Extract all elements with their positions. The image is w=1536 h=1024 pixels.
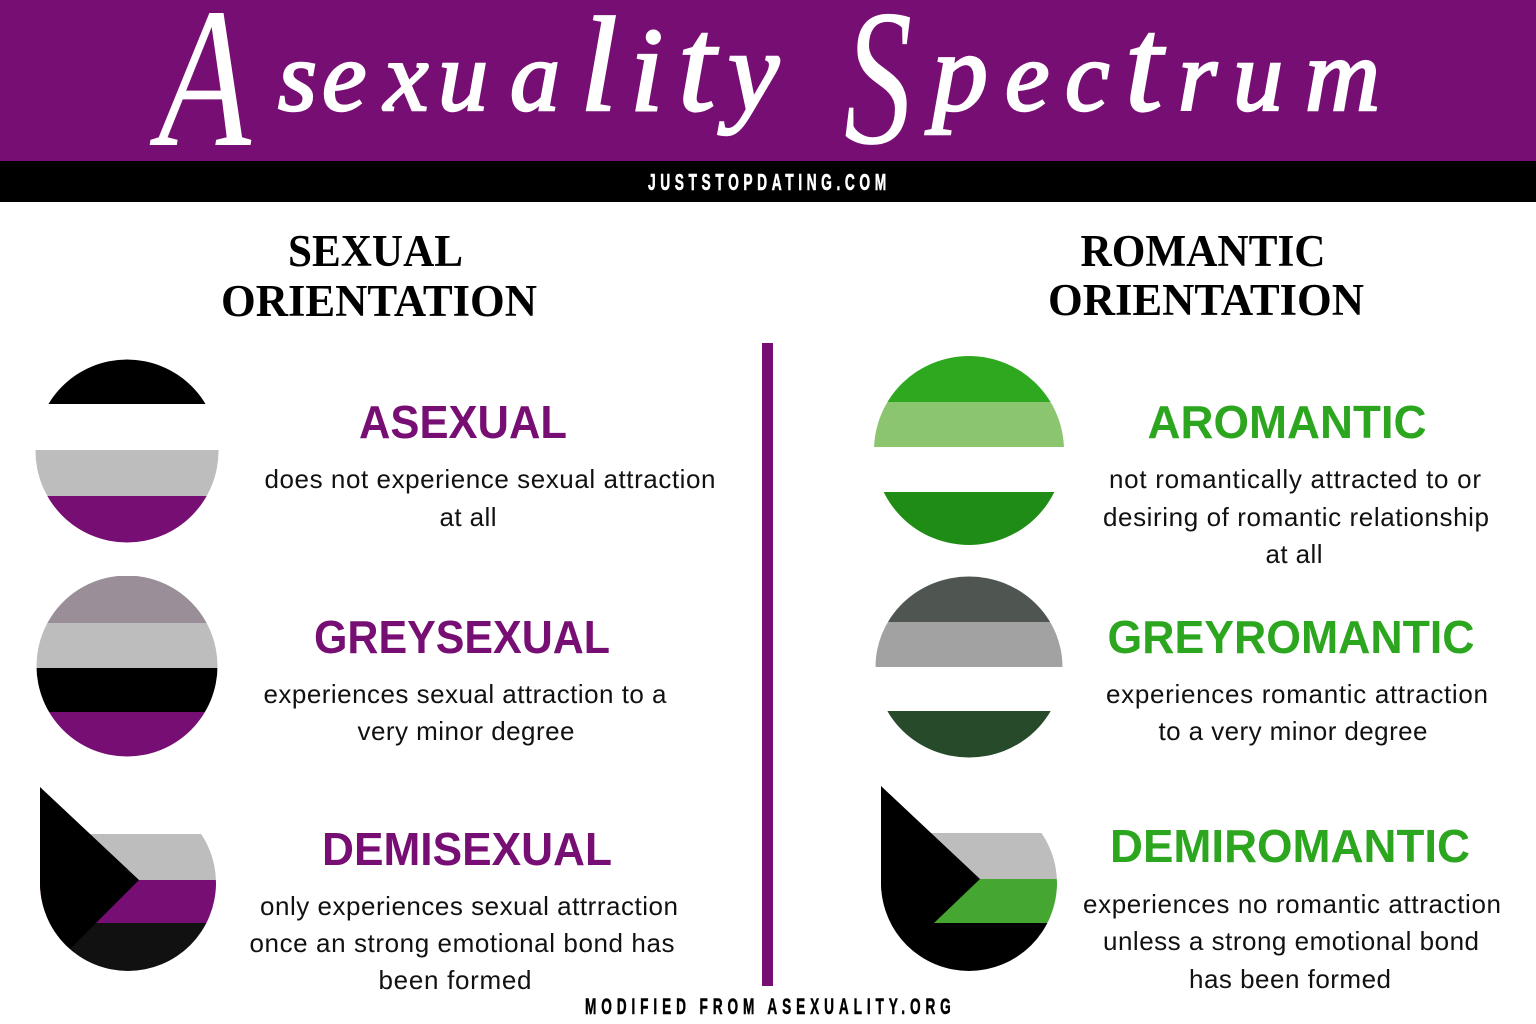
panel: asexual: at all: [440, 502, 496, 532]
title: u: [1233, 21, 1283, 132]
heading: sexual orientation: [221, 226, 537, 326]
black website band: [0, 161, 1536, 202]
title: r: [1178, 21, 1218, 132]
panel: asexual: does not experience sexual attraction: [264, 464, 716, 494]
panel: asexual: ASEXUAL: [359, 396, 567, 448]
icon: demisexual flag: [40, 787, 216, 971]
icon: asexual flag: [30, 359, 230, 543]
panel: aromantic: not romantically attracted to or: [1109, 464, 1481, 494]
panel: demisexual: been formed: [378, 965, 532, 995]
title: u: [438, 21, 488, 132]
panel: demiromantic: unless a strong emotional bond: [1103, 926, 1479, 956]
panel: greyromantic: GREYROMANTIC: [1108, 611, 1474, 663]
icon: aromantic flag: [870, 356, 1070, 545]
panel: greyromantic: [1106, 611, 1488, 746]
panel: aromantic: at all: [1266, 539, 1322, 569]
panel: demisexual: DEMISEXUAL: [322, 823, 612, 875]
panel: demiromantic: DEMIROMANTIC: [1110, 820, 1470, 872]
panel: greysexual: GREYSEXUAL: [314, 611, 610, 663]
panel: aromantic: [1103, 396, 1489, 569]
panel: demiromantic: [1083, 820, 1501, 994]
panel: asexual: [264, 396, 716, 532]
title: c: [1065, 21, 1109, 132]
title: e: [322, 21, 366, 132]
heading: romantic orientation: [1048, 226, 1364, 325]
heading: romantic orientation: ORIENTATION: [1048, 275, 1364, 325]
title: a: [510, 21, 560, 132]
panel: demiromantic: has been formed: [1189, 964, 1391, 994]
title: s: [278, 21, 317, 132]
panel: demisexual: [250, 823, 678, 995]
panel: demisexual: only experiences sexual attrraction: [260, 891, 678, 921]
icon: greysexual flag: [30, 576, 230, 757]
title: e: [1005, 21, 1049, 132]
title: x: [382, 21, 428, 132]
panel: greyromantic: to a very minor degree: [1158, 716, 1428, 746]
title: p: [925, 11, 988, 135]
panel: greysexual: [264, 611, 667, 746]
source credit: MODIFIED FROM ASEXUALITY.ORG: [585, 994, 951, 1019]
title: y: [718, 8, 780, 135]
heading: sexual orientation: ORIENTATION: [221, 276, 537, 326]
website label: JUSTSTOPDATING.COM: [648, 171, 886, 196]
center divider: [762, 343, 773, 986]
panel: demiromantic: experiences no romantic attraction: [1083, 889, 1501, 919]
title: [149, 0, 1380, 189]
panel: aromantic: AROMANTIC: [1148, 396, 1426, 448]
panel: greysexual: experiences sexual attraction to a: [264, 679, 667, 709]
panel: greysexual: very minor degree: [358, 716, 574, 746]
heading: romantic orientation: ROMANTIC: [1080, 226, 1326, 276]
icon: greyromantic flag: [870, 576, 1070, 758]
panel: greyromantic: experiences romantic attraction: [1106, 679, 1488, 709]
panel: demisexual: once an strong emotional bond has: [250, 928, 674, 958]
heading: sexual orientation: SEXUAL: [288, 226, 463, 276]
icon: demiromantic flag: [881, 786, 1057, 971]
header banner: [0, 0, 1536, 189]
panel: aromantic: desiring of romantic relationship: [1103, 502, 1489, 532]
title: m: [1305, 18, 1380, 133]
title: i: [630, 3, 663, 136]
